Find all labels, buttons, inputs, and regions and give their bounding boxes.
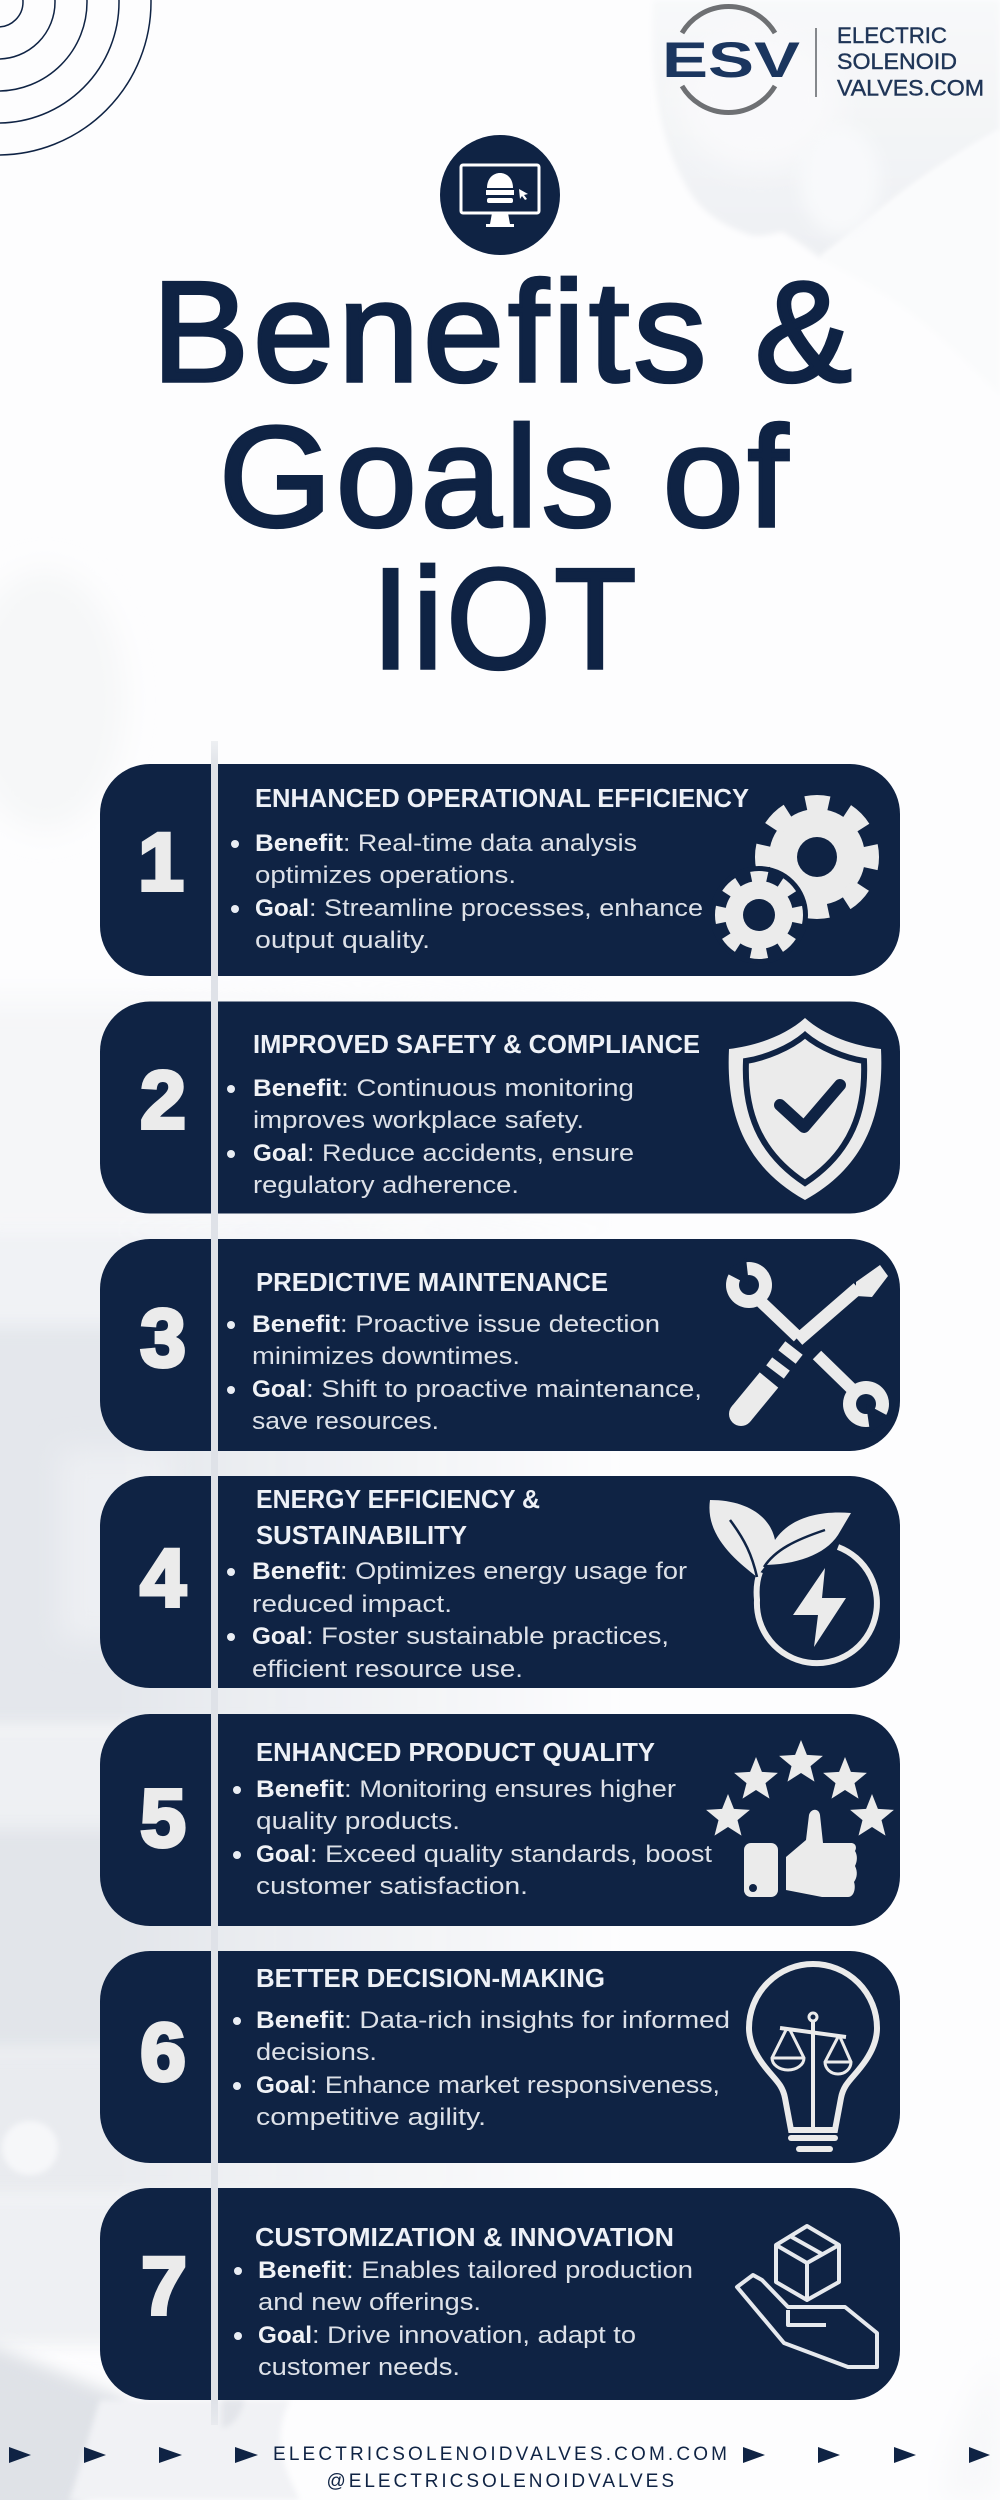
panel: card 5: [100, 1714, 900, 1926]
heading 4: SUSTAINABILITY: [256, 1520, 467, 1550]
number 4: 4: [140, 1533, 186, 1624]
panel: card 6: [100, 1951, 900, 2163]
title: IiOT: [372, 540, 640, 699]
footer text: @ELECTRICSOLENOIDVALVES: [326, 2471, 674, 2492]
number 2: 2: [140, 1055, 186, 1146]
heading 4: ENERGY EFFICIENCY &: [256, 1484, 540, 1514]
text block 4: Benefit: [252, 1558, 340, 1585]
text block 3: minimizes downtimes.: [252, 1343, 520, 1370]
logo: [662, 6, 984, 113]
text block 7: and new offerings.: [258, 2289, 481, 2316]
heading 2: IMPROVED SAFETY & COMPLIANCE: [253, 1029, 700, 1059]
logo: ESV: [662, 32, 801, 88]
icon: leaves and energy bolt: [709, 1500, 877, 1663]
text block 1: optimizes operations.: [255, 862, 516, 889]
text block 2: : Continuous monitoring: [341, 1075, 634, 1102]
icon: gears: [710, 795, 879, 964]
text block 2: improves workplace safety.: [253, 1107, 584, 1134]
text block 6: Goal: [256, 2072, 310, 2099]
heading 3: PREDICTIVE MAINTENANCE: [256, 1267, 608, 1297]
text block 5: : Monitoring ensures higher: [344, 1776, 676, 1803]
text block 1: : Streamline processes, enhance: [309, 895, 703, 922]
number 6: 6: [140, 2007, 186, 2098]
title: Benefits &: [152, 253, 856, 412]
text block 1: [231, 830, 703, 954]
text block 5: customer satisfaction.: [256, 1873, 528, 1900]
text block 4: : Foster sustainable practices,: [306, 1623, 669, 1650]
text block 5: [233, 1776, 712, 1900]
text block 1: Goal: [255, 895, 309, 922]
text block 4: efficient resource use.: [252, 1656, 523, 1683]
footer text: ELECTRICSOLENOIDVALVES.COM.COM: [273, 2444, 727, 2465]
number 1: 1: [138, 817, 184, 908]
panel: card 2: [100, 1002, 900, 1214]
number 5: 5: [140, 1773, 186, 1864]
text block 6: : Data-rich insights for informed: [344, 2007, 730, 2034]
icon: monitor with burger: [440, 135, 560, 255]
text block 6: [233, 2007, 730, 2131]
vertical divider line: [211, 741, 218, 2425]
text block 7: : Drive innovation, adapt to: [312, 2322, 636, 2349]
text block 7: Benefit: [258, 2257, 346, 2284]
panel: card 1: [100, 764, 900, 976]
text block 7: : Enables tailored production: [346, 2257, 693, 2284]
text block 5: : Exceed quality standards, boost: [310, 1841, 712, 1868]
number 3: 3: [140, 1293, 186, 1384]
panel: card 7: [100, 2188, 900, 2400]
text block 6: decisions.: [256, 2039, 377, 2066]
decorative concentric arcs: [0, 0, 151, 155]
icon: shield with check: [729, 1018, 881, 1200]
icon: hand holding box: [737, 2226, 877, 2367]
icon: light bulb with scales: [749, 1964, 877, 2149]
footer text: [273, 2444, 727, 2492]
text block 3: : Proactive issue detection: [340, 1311, 660, 1338]
text block 2: regulatory adherence.: [253, 1172, 519, 1199]
text block 1: output quality.: [255, 927, 430, 954]
text block 2: Benefit: [253, 1075, 341, 1102]
text block 6: : Enhance market responsiveness,: [310, 2072, 720, 2099]
text block 5: Benefit: [256, 1776, 344, 1803]
title: [152, 253, 856, 699]
text block 3: : Shift to proactive maintenance,: [306, 1376, 702, 1403]
text block 4: reduced impact.: [252, 1591, 452, 1618]
text block 6: Benefit: [256, 2007, 344, 2034]
number 7: 7: [141, 2241, 187, 2332]
text block 5: quality products.: [256, 1808, 460, 1835]
heading 7: CUSTOMIZATION & INNOVATION: [255, 2222, 674, 2252]
text block 4: Goal: [252, 1623, 306, 1650]
heading 6: BETTER DECISION-MAKING: [256, 1963, 605, 1993]
title: Goals of: [219, 398, 792, 557]
text block 3: save resources.: [252, 1408, 439, 1435]
logo: ELECTRIC: [837, 23, 947, 48]
logo: SOLENOID: [837, 49, 957, 74]
logo: VALVES.COM: [837, 76, 984, 100]
heading 5: ENHANCED PRODUCT QUALITY: [256, 1737, 655, 1767]
icon: stars and thumbs up: [706, 1740, 894, 1897]
text block 1: Benefit: [255, 830, 343, 857]
panel: card 4: [100, 1476, 900, 1688]
text block 7: Goal: [258, 2322, 312, 2349]
footer arrows: [9, 2447, 990, 2463]
text block 4: : Optimizes energy usage for: [340, 1558, 687, 1585]
text block 2: : Reduce accidents, ensure: [307, 1140, 634, 1167]
heading 4: [256, 1484, 540, 1550]
text block 3: Benefit: [252, 1311, 340, 1338]
text block 3: [227, 1311, 702, 1435]
heading 1: ENHANCED OPERATIONAL EFFICIENCY: [255, 783, 749, 813]
icon: crossed wrench and screwdriver: [724, 1258, 892, 1432]
text block 7: customer needs.: [258, 2354, 460, 2381]
text block 6: competitive agility.: [256, 2104, 486, 2131]
text block 2: Goal: [253, 1140, 307, 1167]
text block 7: [234, 2257, 693, 2381]
text block 4: [227, 1558, 687, 1683]
text block 3: Goal: [252, 1376, 306, 1403]
text block 2: [227, 1075, 634, 1199]
panel: card 3: [100, 1239, 900, 1451]
text block 1: : Real-time data analysis: [343, 830, 637, 857]
text block 5: Goal: [256, 1841, 310, 1868]
